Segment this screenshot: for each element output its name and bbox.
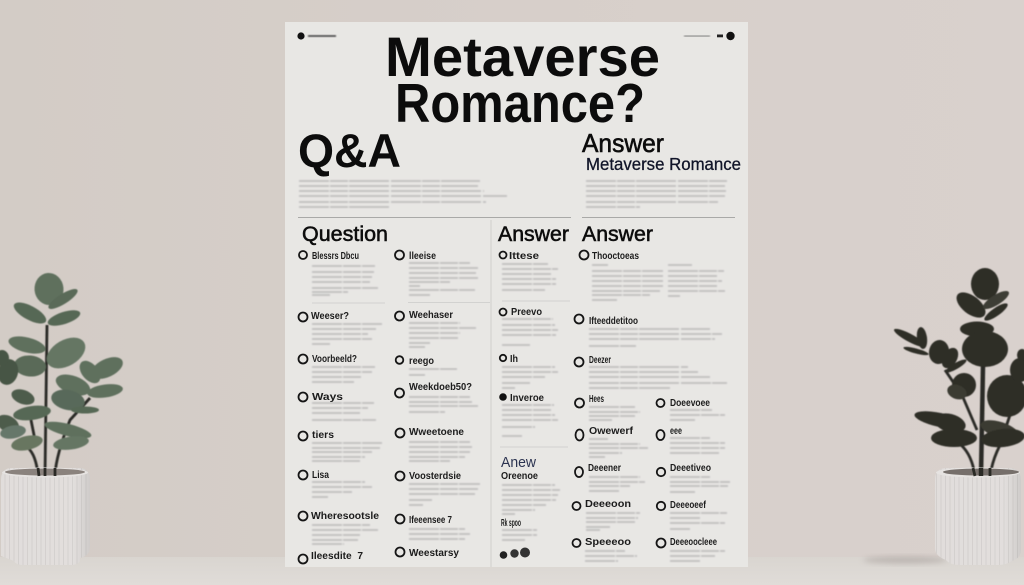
item 3: Deezer [589, 355, 611, 366]
item 2: Weeser? [311, 311, 349, 322]
item 5 [656, 537, 725, 561]
poster [285, 22, 748, 567]
item 5: Owewerf [589, 426, 634, 437]
item 1: Thooctoeas [592, 251, 639, 262]
left pot [1, 468, 90, 565]
item 7 [396, 514, 470, 539]
item 4 [298, 392, 376, 420]
intro paragraph left [299, 181, 507, 207]
header left marker [297, 32, 336, 40]
item 4 [575, 394, 640, 420]
column 1 questions [298, 251, 382, 565]
item 2 [656, 426, 725, 453]
item 8 [572, 537, 637, 561]
item 6 [501, 518, 537, 540]
item 4 [395, 382, 478, 412]
heading: Answer: Answer [582, 128, 664, 158]
item 1 [580, 250, 725, 300]
item 1 [500, 251, 558, 290]
item 6: Deeener [588, 463, 621, 474]
title: Romance? [395, 72, 645, 134]
intro paragraph right [586, 181, 727, 207]
column rules inner [312, 301, 570, 447]
column 2 questions [395, 250, 480, 565]
right pot [935, 468, 1021, 565]
item 5 [298, 430, 382, 461]
item 6 [396, 471, 480, 505]
item 4 [499, 393, 558, 436]
item 6: Voosterdsie [409, 471, 461, 482]
item 1: lleeise [409, 251, 436, 262]
item 2: Ifteeddetitoo [589, 316, 638, 327]
item 2: Weehaser [409, 310, 453, 321]
item 4: Weekdoeb50? [409, 382, 472, 393]
heading: Q&A: Q&A [298, 124, 401, 177]
small icons [500, 548, 530, 559]
item 3: Voorbeeld? [312, 354, 357, 365]
title: Metaverse [385, 25, 660, 88]
heading: Answer column 4: Answer [582, 222, 653, 246]
heading: Question: Question [302, 222, 388, 246]
item 1 [299, 251, 378, 295]
item 7 [298, 511, 379, 544]
item 3 [396, 356, 457, 375]
header right marker [684, 32, 735, 40]
item 3 [298, 354, 375, 382]
item 3 [500, 354, 558, 388]
item 2 [298, 311, 382, 344]
stems [981, 366, 983, 476]
item 8: Ileesdite 7 [311, 551, 363, 562]
item 3: Ih [510, 354, 518, 365]
item 2 [395, 310, 476, 347]
column 4 answers [574, 250, 727, 388]
leaves [892, 268, 1024, 449]
left plant [0, 272, 126, 475]
item 2: Preevo [511, 307, 542, 318]
column rule [490, 220, 492, 567]
item 5: Oreenoe [501, 471, 538, 482]
item 5: tiers [312, 430, 334, 441]
item 3 [574, 355, 727, 388]
item 4: Deeeoeef [670, 500, 707, 511]
title [385, 25, 660, 134]
item 4: Hees [589, 394, 604, 405]
item 4 [657, 500, 727, 529]
section rules [298, 216, 735, 218]
item 7: Ifeeensee 7 [409, 515, 452, 526]
item 6: Rk spoo [501, 518, 521, 529]
item 2 [574, 314, 722, 346]
item 5 [396, 427, 472, 461]
item 7: Wheresootsle [311, 511, 379, 522]
item 5 [576, 426, 648, 457]
item 2 [500, 307, 558, 345]
right plant [892, 268, 1024, 476]
item 5: Wweetoene [409, 427, 464, 438]
column 5 answers [656, 398, 730, 561]
item 6 [298, 470, 372, 497]
right pot shadow [863, 556, 947, 564]
column 4 lower answers [572, 394, 648, 561]
column 3 answers [499, 251, 560, 559]
stems [28, 325, 90, 475]
item 5 [501, 454, 560, 514]
item 1 [656, 398, 725, 420]
item 8 [396, 548, 478, 565]
item 7: Deeeoon [585, 499, 631, 510]
item 8: Speeeoo [585, 537, 631, 548]
item 5: Anew [501, 454, 536, 471]
item 6 [575, 463, 645, 491]
item 7 [572, 499, 640, 530]
item 1: Blessrs Dbcu [312, 251, 359, 262]
item 1 [395, 250, 478, 295]
item 3: Deeetiveo [670, 463, 711, 474]
heading: Answer column 3: Answer [498, 222, 569, 246]
subheading: Metaverse Romance: Metaverse Romance [586, 154, 741, 174]
item 1: Ittese [509, 251, 540, 262]
item 6: Lisa [312, 470, 329, 481]
item 8 [298, 551, 372, 565]
item 8: Weestarsy [409, 548, 459, 559]
item 3: reego [409, 356, 434, 367]
item 1: Doeevoee [670, 398, 710, 409]
leaves [0, 272, 126, 453]
item 2: eee [670, 426, 682, 437]
item 3 [657, 463, 730, 492]
floor [0, 557, 1024, 585]
item 4: Inveroe [510, 393, 544, 404]
item 4: Ways [312, 392, 344, 403]
item 5: Deeeoocleee [670, 537, 717, 548]
